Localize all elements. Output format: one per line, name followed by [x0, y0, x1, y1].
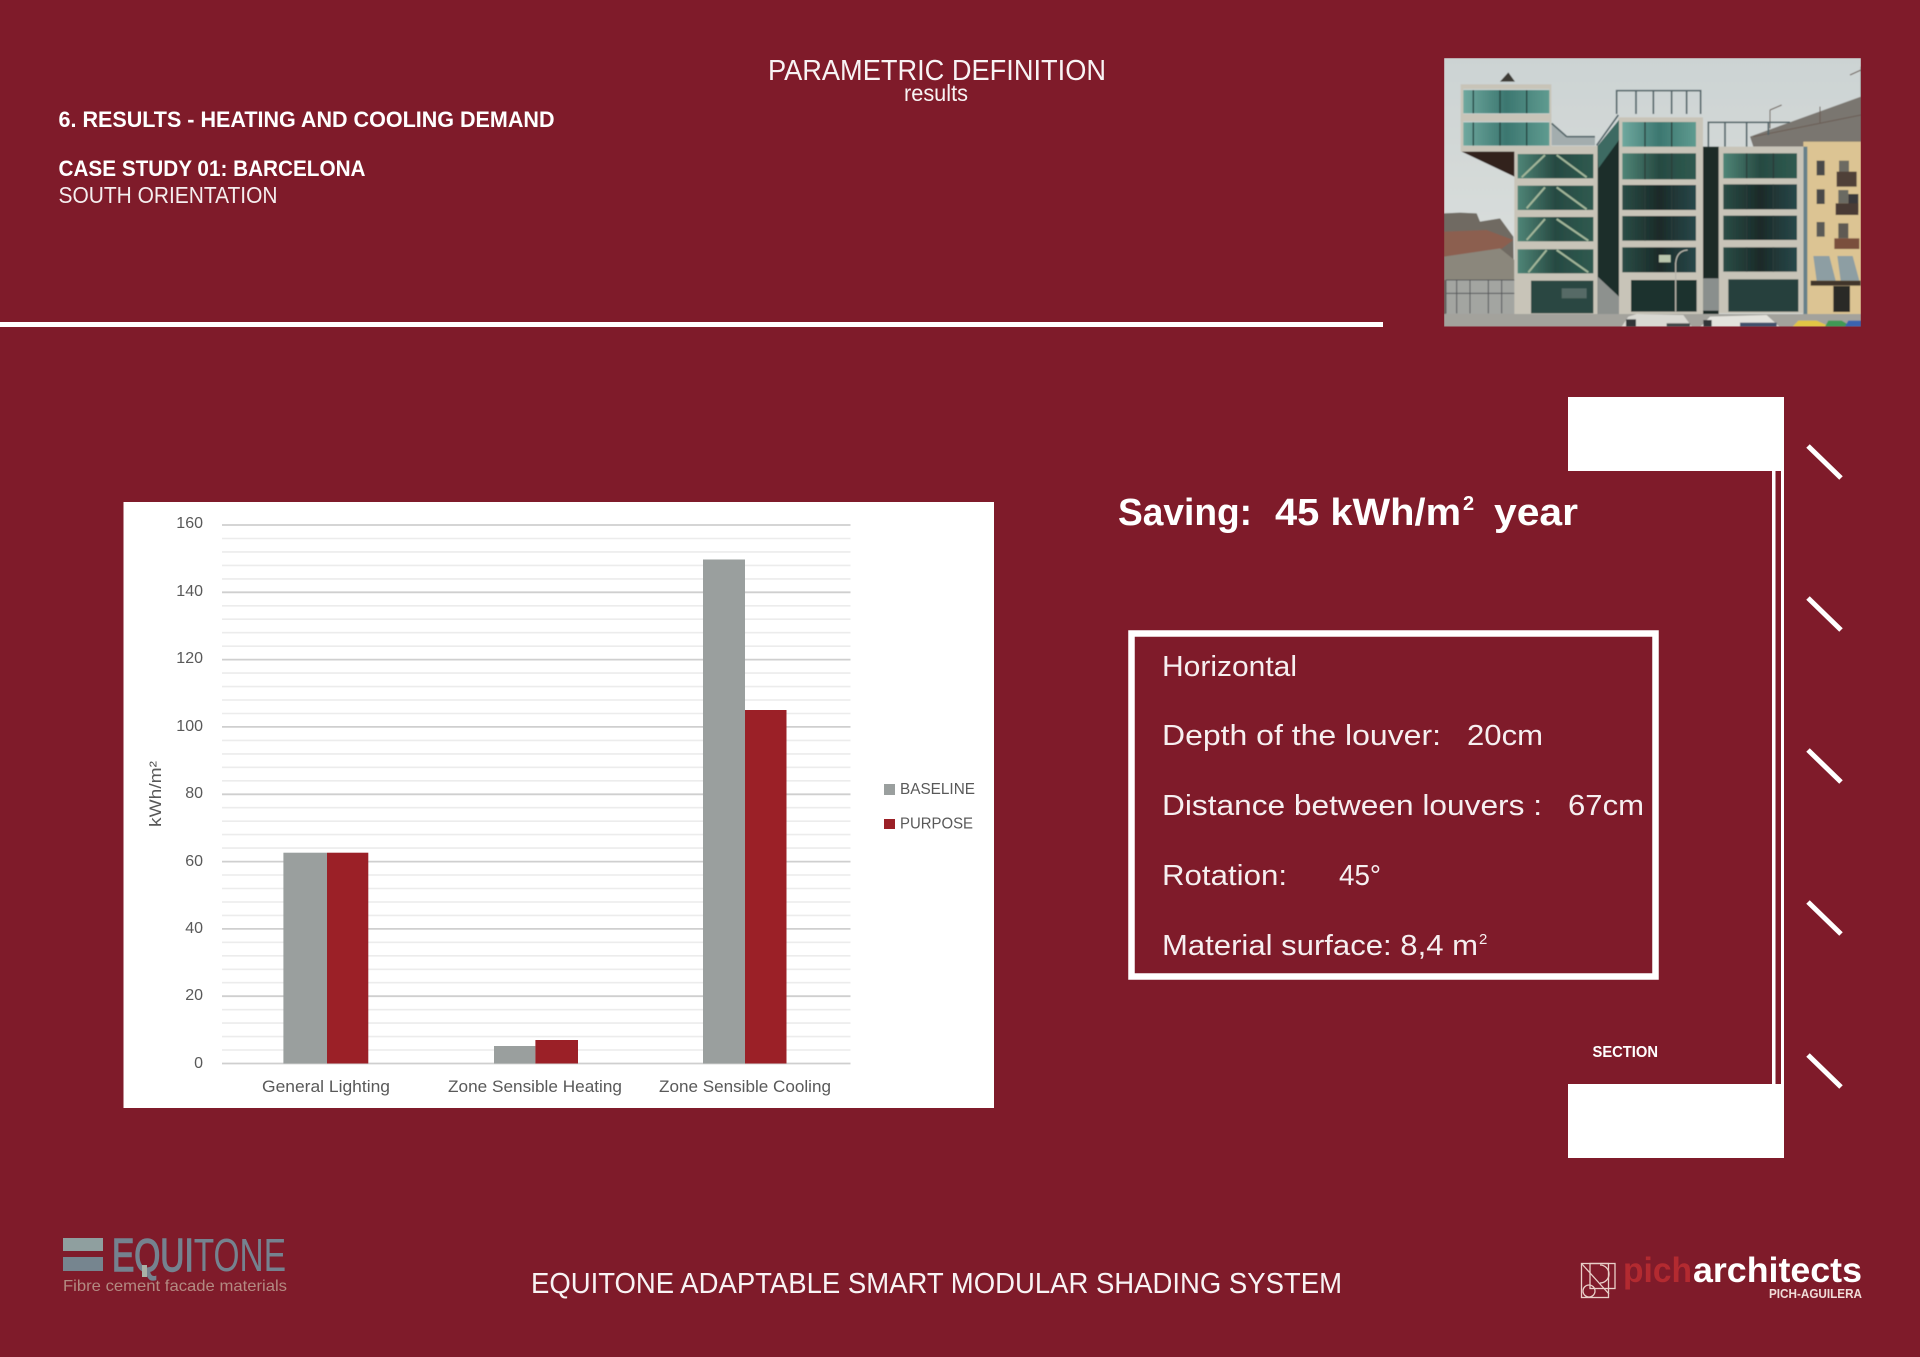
legend: PURPOSE	[900, 816, 973, 832]
saving headline	[1118, 492, 1578, 534]
header divider line	[0, 322, 1383, 327]
section heading: CASE STUDY 01: BARCELONA	[58, 156, 366, 181]
section drawing	[1568, 397, 1841, 1158]
title: results	[904, 80, 968, 106]
logo: pich architects: architects	[1693, 1251, 1862, 1290]
category labels: Zone Sensible Heating	[448, 1078, 622, 1096]
top floor slab	[1568, 397, 1784, 471]
parameter list	[1162, 651, 1644, 962]
facade lines	[1772, 471, 1784, 1084]
photo: Barcelona building	[1444, 58, 1861, 327]
section heading: 6. RESULTS - HEATING AND COOLING DEMAND	[58, 107, 554, 132]
category labels: General Lighting	[262, 1078, 390, 1096]
parameter list: Depth of the louver:	[1162, 720, 1441, 752]
legend	[884, 781, 975, 832]
bars: Zone Sensible Heating	[494, 1040, 578, 1064]
parameter list: 2	[1479, 931, 1487, 948]
y axis tick labels: 60	[185, 853, 203, 870]
y axis tick labels: 160	[176, 515, 203, 532]
parameter list: Distance between louvers :	[1162, 790, 1542, 822]
logo: pich architects	[1582, 1251, 1862, 1301]
y axis tick labels	[176, 515, 203, 1072]
logo: pich architects: pich	[1623, 1251, 1692, 1290]
logo mark	[1582, 1264, 1615, 1298]
y axis tick labels: 80	[185, 785, 203, 802]
section heading	[58, 107, 554, 208]
bottom floor slab	[1568, 1084, 1784, 1158]
logo: Equitone	[63, 1229, 287, 1295]
y axis tick labels: 140	[176, 583, 203, 600]
section label: SECTION	[1592, 1044, 1658, 1061]
panel: louver parameters	[1132, 634, 1656, 976]
chart gridlines	[222, 525, 850, 1064]
logo: pich architects: PICH-AGUILERA	[1769, 1287, 1862, 1301]
parameter list: Horizontal	[1162, 651, 1297, 683]
panel: bar chart	[124, 502, 994, 1108]
bars: Zone Sensible Cooling	[703, 560, 786, 1064]
title	[768, 55, 1106, 106]
parameter list: Rotation:	[1162, 860, 1287, 892]
y axis tick labels: 0	[194, 1055, 203, 1072]
legend: BASELINE	[900, 781, 975, 798]
logo: Equitone: Fibre cement facade materials	[63, 1278, 287, 1295]
category labels	[262, 1078, 831, 1096]
saving headline: Saving:	[1118, 492, 1252, 534]
y axis tick labels: 120	[176, 650, 203, 667]
category labels: Zone Sensible Cooling	[659, 1078, 831, 1096]
bars: General Lighting	[283, 853, 368, 1064]
y axis tick labels: 20	[185, 987, 203, 1004]
parameter list: 67cm	[1568, 790, 1644, 822]
parameter list: 45°	[1339, 860, 1381, 892]
y axis tick labels: 40	[185, 920, 203, 937]
saving headline: 2	[1463, 493, 1474, 515]
title: PARAMETRIC DEFINITION	[768, 55, 1106, 87]
logo: Equitone: EQUITONE	[112, 1229, 286, 1281]
y axis title: kWh/m²	[147, 760, 165, 827]
louvers	[1808, 446, 1841, 1087]
parameter list: Material surface: 8,4 m	[1162, 930, 1478, 962]
footer title: EQUITONE ADAPTABLE SMART MODULAR SHADING SYSTEM	[531, 1268, 1342, 1300]
saving headline: year	[1494, 492, 1578, 534]
section heading: SOUTH ORIENTATION	[58, 182, 278, 208]
y axis tick labels: 100	[176, 718, 203, 735]
parameter list: 20cm	[1467, 720, 1543, 752]
saving headline: 45 kWh/m	[1275, 492, 1461, 534]
